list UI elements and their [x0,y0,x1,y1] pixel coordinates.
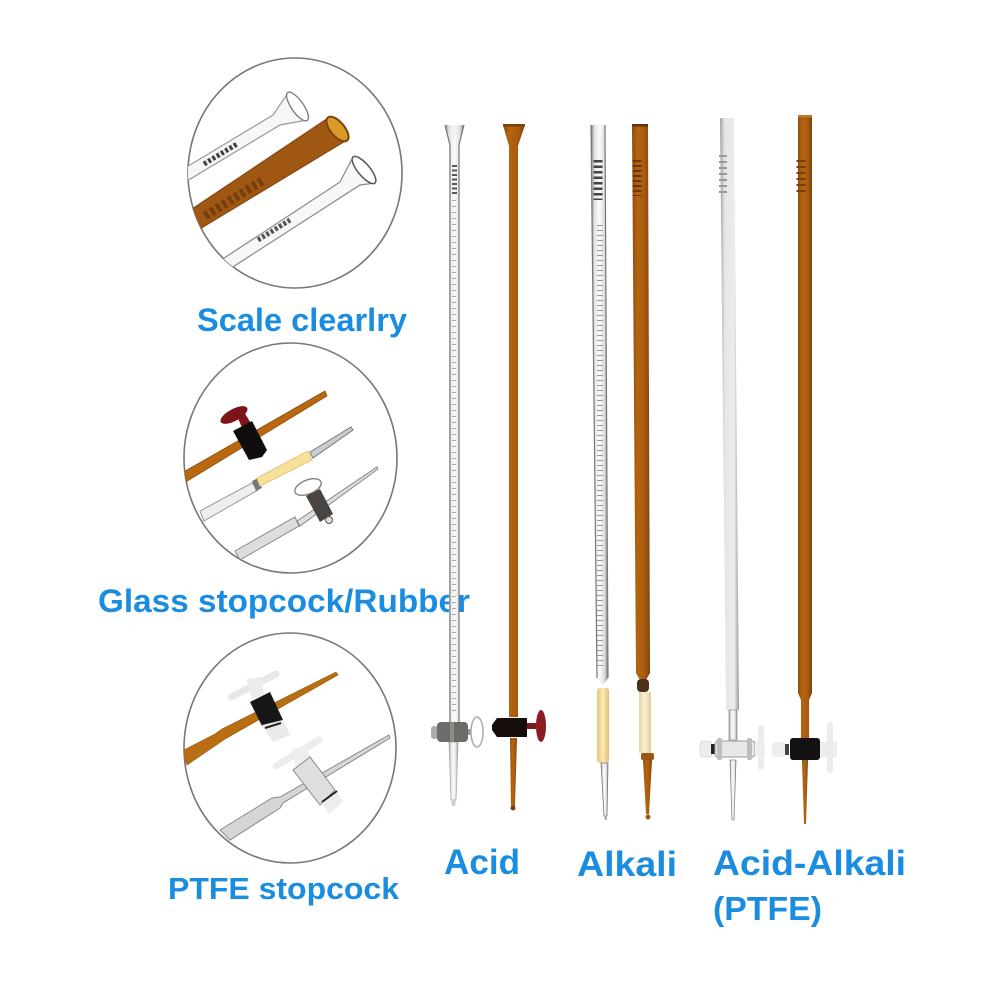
label: PTFE in parentheses: (PTFE) [713,890,822,927]
label: PTFE stopcock: PTFE stopcock [168,871,400,906]
burette: acid-alkali PTFE clear [700,118,765,820]
panel: PTFE stopcock detail circle [182,633,396,863]
burette: acid-alkali PTFE amber [772,115,837,824]
clear burette with yellow rubber [200,427,353,521]
amber tube [193,116,350,228]
amber burette with PTFE stopcock [182,672,338,765]
burette: alkali clear [591,125,609,820]
upper clear funnel tube [188,92,310,181]
clear burette with glass stopcock [235,467,378,560]
label: acid: Acid [444,843,520,882]
panel: scale detail circle [180,58,402,288]
clear burette with PTFE stopcock [220,735,390,840]
burette: acid clear [431,125,483,806]
label: alkali: Alkali [577,845,677,884]
burette: acid amber [492,124,546,810]
label: scale clearly: Scale clearlry [197,302,407,338]
amber burette with red glass stopcock [180,391,327,483]
label: glass stopcock / rubber: Glass stopcock/Rubber [98,583,470,619]
panel: stopcock and rubber detail circle [180,343,397,573]
burette: alkali amber [632,124,654,820]
label: acid-alkali: Acid-Alkali [713,844,906,883]
lower clear funnel tube [223,156,377,267]
